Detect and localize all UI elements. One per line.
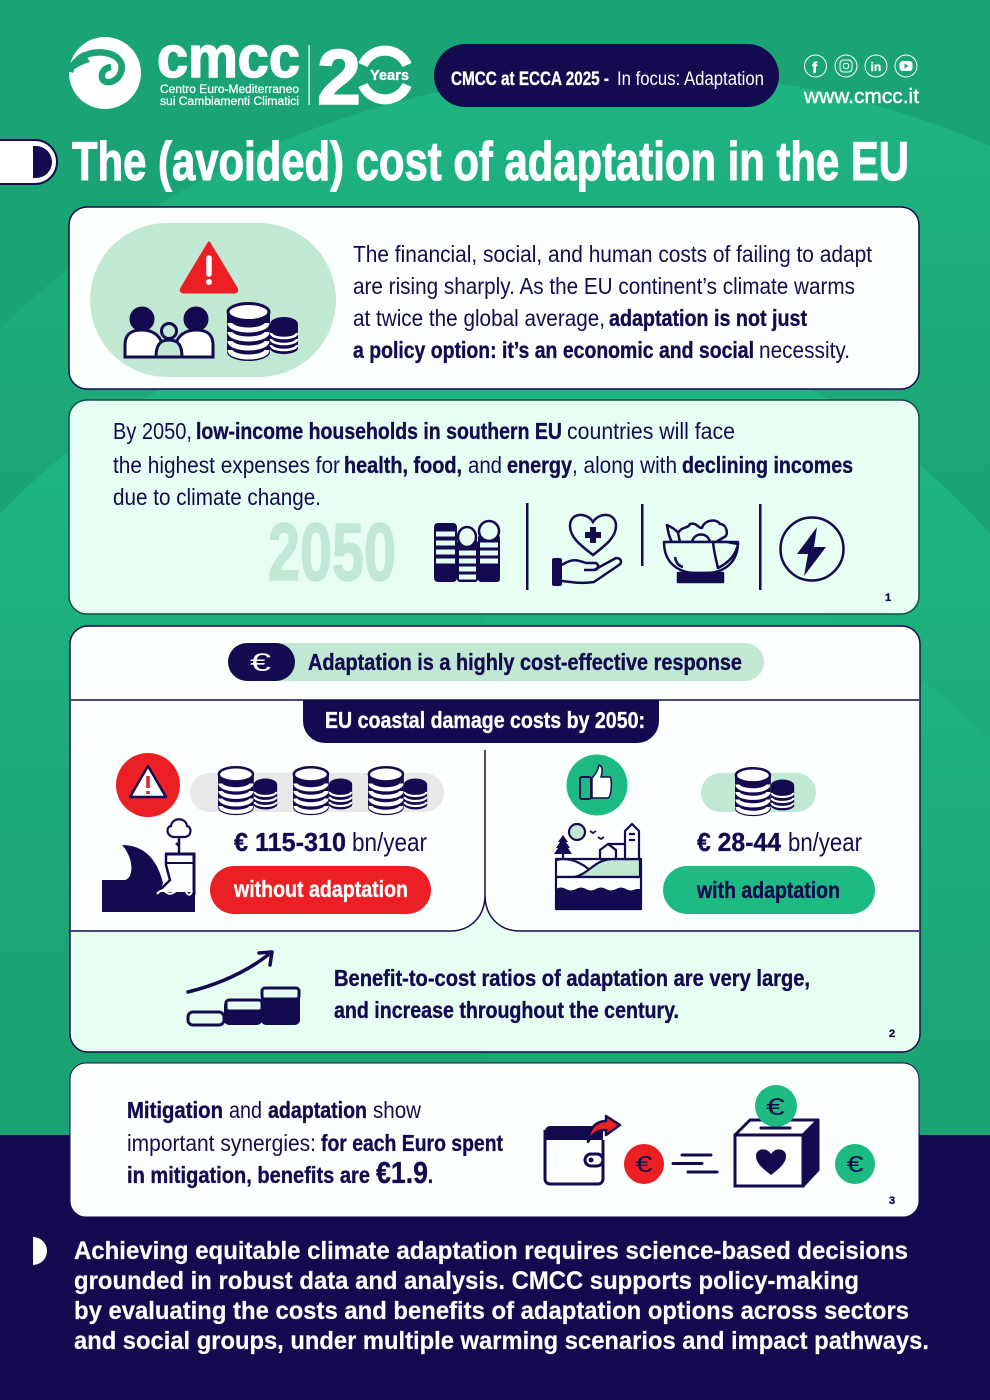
wordmark: cmcc	[157, 25, 300, 90]
text block: due to climate change.	[113, 484, 321, 510]
text block: at twice the global average,	[353, 305, 605, 331]
icon: instagram	[835, 55, 857, 77]
text block: and	[229, 1097, 262, 1123]
text block: Mitigation	[127, 1097, 223, 1123]
event pill	[434, 44, 779, 107]
text block: , along with	[572, 452, 677, 478]
logo subtitle	[160, 84, 299, 108]
panel: cost-effective response	[70, 626, 920, 1052]
mint lower band	[71, 895, 919, 1051]
icon: green euro coin: €	[846, 1151, 864, 1177]
icon: red euro coin: €	[636, 1151, 653, 1177]
text block: energy	[507, 452, 572, 478]
icon: protected landscape	[554, 824, 641, 909]
logo subtitle: sui Cambiamenti Climatici	[160, 96, 299, 108]
icon: heart and hand	[552, 515, 621, 586]
icon: warning triangle	[181, 243, 237, 292]
column: with adaptation	[554, 754, 875, 914]
text block	[113, 418, 853, 510]
text block	[127, 1097, 503, 1190]
coins bar	[190, 767, 444, 815]
text block	[353, 241, 873, 363]
icon: wave and eroding coast	[102, 819, 195, 912]
icon: linkedin: in	[870, 60, 881, 74]
divider	[526, 503, 528, 590]
heading pill	[228, 643, 764, 681]
subheading pill: EU coastal damage costs by 2050:	[325, 707, 645, 733]
conclusion text	[74, 1237, 929, 1355]
label pill	[210, 866, 431, 914]
icon: income coin columns	[434, 521, 500, 582]
text block: a policy option: it’s an economic and social	[353, 337, 754, 363]
text block: and	[468, 452, 502, 478]
panel: mitigation synergies	[70, 1063, 919, 1217]
text block: adaptation	[268, 1097, 367, 1123]
icon: warning badge	[116, 753, 180, 817]
value: € 28-44	[697, 827, 782, 857]
text block: .	[428, 1162, 433, 1188]
icon: red euro coin	[624, 1144, 664, 1184]
footnote 2: 2	[889, 1028, 895, 1040]
divider	[641, 504, 644, 566]
text block: countries will face	[567, 418, 735, 444]
icon: youtube	[895, 55, 917, 77]
label pill: without adaptation	[233, 876, 408, 902]
text block: necessity.	[759, 337, 850, 363]
text block: The financial, social, and human costs of failing to adapt	[353, 241, 873, 267]
logo: CMCC 20 years	[69, 25, 409, 121]
20 years mark: Years	[370, 67, 409, 84]
text block: important synergies:	[127, 1130, 316, 1156]
icon: facebook: f	[812, 60, 818, 77]
icon: donation box: €	[766, 1094, 786, 1121]
text block: Benefit-to-cost ratios of adaptation are very large,	[334, 965, 810, 991]
text block: €1.9	[376, 1155, 428, 1190]
text block: health, food,	[344, 452, 462, 478]
conclusion text: and social groups, under multiple warming scenarios and impact pathways.	[74, 1327, 929, 1355]
icon: donation box	[735, 1085, 818, 1186]
20 years mark: 2	[317, 33, 361, 121]
text block: in mitigation, benefits are	[127, 1162, 370, 1188]
divider	[759, 504, 762, 590]
text block: are rising sharply. As the EU continent’s climate warms	[353, 273, 855, 299]
label pill	[663, 866, 875, 914]
text block: for each Euro spent	[321, 1130, 503, 1156]
panel: low-income households	[69, 400, 919, 614]
text block: and increase throughout the century.	[334, 997, 679, 1023]
title marker	[0, 140, 57, 184]
heading pill: €	[250, 649, 271, 677]
value: € 115-310	[234, 827, 346, 857]
value: bn/year	[352, 827, 427, 857]
icon group: warning, people, coins	[90, 223, 336, 377]
social links	[803, 55, 919, 108]
icon: CMCC swirl	[69, 37, 141, 109]
text block: the highest expenses for	[113, 452, 340, 478]
value: bn/year	[788, 827, 862, 857]
value	[234, 827, 427, 857]
footnote 3: 3	[889, 1195, 895, 1207]
text block: By 2050,	[113, 418, 192, 444]
20 years mark	[317, 33, 409, 121]
icon: green euro coin	[835, 1144, 875, 1184]
icon: equals lines	[673, 1155, 717, 1172]
label pill: with adaptation	[696, 877, 840, 903]
value	[697, 827, 862, 857]
subheading pill	[303, 700, 659, 743]
text block: adaptation is not just	[609, 305, 807, 331]
conclusion text: grounded in robust data and analysis. CMCC supports policy-making	[74, 1267, 859, 1295]
event pill: CMCC at ECCA 2025 -	[451, 69, 609, 90]
text block: low-income households in southern EU	[196, 418, 562, 444]
icon: people	[125, 308, 213, 357]
logo subtitle: Centro Euro-Mediterraneo	[160, 84, 299, 96]
website: www.cmcc.it	[803, 86, 919, 108]
footnote 1: 1	[885, 592, 891, 604]
conclusion text: Achieving equitable climate adaptation requires science-based decisions	[74, 1237, 908, 1265]
icon: wallet	[545, 1116, 620, 1184]
column: without adaptation	[102, 753, 444, 914]
text block: show	[373, 1097, 421, 1123]
icon: rising stairs of coins	[188, 952, 300, 1025]
conclusion text: by evaluating the costs and benefits of adaptation options across sectors	[74, 1297, 909, 1325]
icon: coin stacks	[227, 304, 298, 361]
icon: energy bolt	[780, 518, 844, 580]
heading pill: Adaptation is a highly cost-effective response	[308, 649, 742, 675]
icon: salad bowl	[664, 521, 738, 582]
text block: declining incomes	[682, 452, 853, 478]
event pill: In focus: Adaptation	[617, 69, 764, 90]
panel: failing to adapt	[69, 207, 919, 389]
watermark year: 2050	[268, 507, 396, 598]
text block	[334, 965, 810, 1023]
conclusion marker	[33, 1237, 47, 1265]
coins bar	[701, 768, 816, 816]
icon: thumbs up badge	[566, 754, 628, 816]
